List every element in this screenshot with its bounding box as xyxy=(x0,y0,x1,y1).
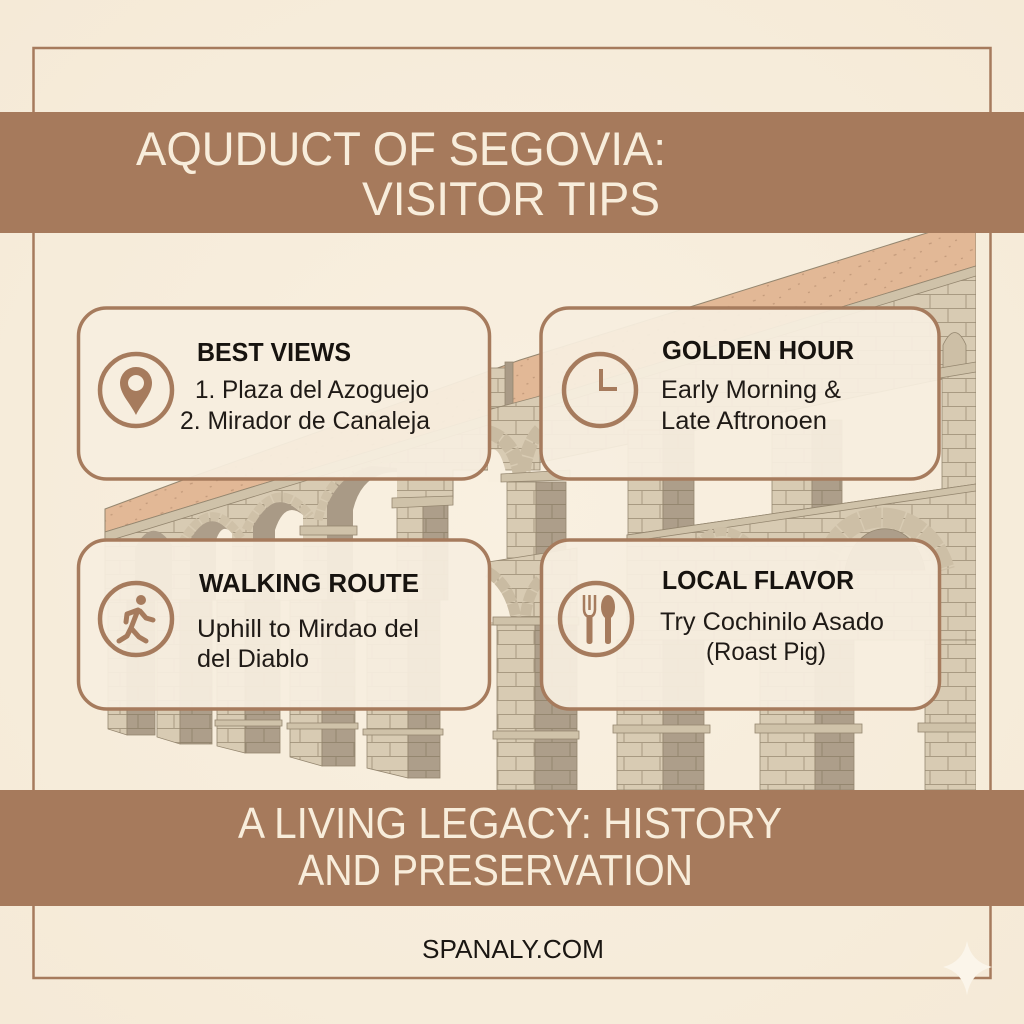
golden hour description: Early Morning & xyxy=(661,376,841,404)
title: AQUDUCT OF SEGOVIA: xyxy=(136,122,666,175)
title: VISITOR TIPS xyxy=(362,172,660,225)
top title band xyxy=(0,112,1024,233)
icon: walking person xyxy=(100,583,172,655)
walking route description: Uphill to Mirdao del xyxy=(197,615,419,643)
panel: walking route xyxy=(78,540,490,709)
list of viewpoints: 1. Plaza del Azoguejo xyxy=(195,376,429,404)
walking route description: del Diablo xyxy=(197,645,309,673)
local flavor description: (Roast Pig) xyxy=(706,638,826,666)
panel: golden hour xyxy=(541,308,939,479)
stone wall xyxy=(104,276,976,538)
golden hour description xyxy=(661,376,841,435)
heading: local flavor: LOCAL FLAVOR xyxy=(662,565,854,595)
heading: walking route: WALKING ROUTE xyxy=(199,568,419,598)
left arch openings xyxy=(141,480,397,538)
bottom heading: AND PRESERVATION xyxy=(298,846,693,895)
icon: map pin xyxy=(100,354,172,426)
bottom heading: A LIVING LEGACY: HISTORY xyxy=(238,799,782,848)
heading: golden hour: GOLDEN HOUR xyxy=(662,335,854,365)
icon: fork and spoon xyxy=(560,583,632,655)
cornice xyxy=(105,266,976,542)
walking route description xyxy=(197,615,419,673)
aqueduct illustration xyxy=(105,232,976,790)
lower right piers xyxy=(613,640,976,790)
bottom band xyxy=(0,790,1024,906)
heading: best views: BEST VIEWS xyxy=(197,337,351,367)
local flavor description xyxy=(660,608,884,666)
bottom heading xyxy=(238,799,782,895)
golden hour description: Late Aftronoen xyxy=(661,407,827,435)
lower right band with arch xyxy=(627,484,976,640)
panel: best views xyxy=(78,308,490,479)
watermark sparkle xyxy=(943,941,992,995)
upper right piers xyxy=(628,332,976,538)
left piers xyxy=(108,496,453,778)
list of viewpoints: 2. Mirador de Canaleja xyxy=(180,407,430,435)
orange attic band xyxy=(105,232,976,532)
website credit: SPANALY.COM xyxy=(422,934,604,964)
local flavor description: Try Cochinilo Asado xyxy=(660,608,884,636)
title xyxy=(136,122,666,225)
icon: clock xyxy=(564,354,636,426)
centre arch strip xyxy=(488,362,540,482)
list of viewpoints xyxy=(180,376,430,435)
centre pier xyxy=(488,470,579,790)
panel: local flavor xyxy=(542,540,940,709)
